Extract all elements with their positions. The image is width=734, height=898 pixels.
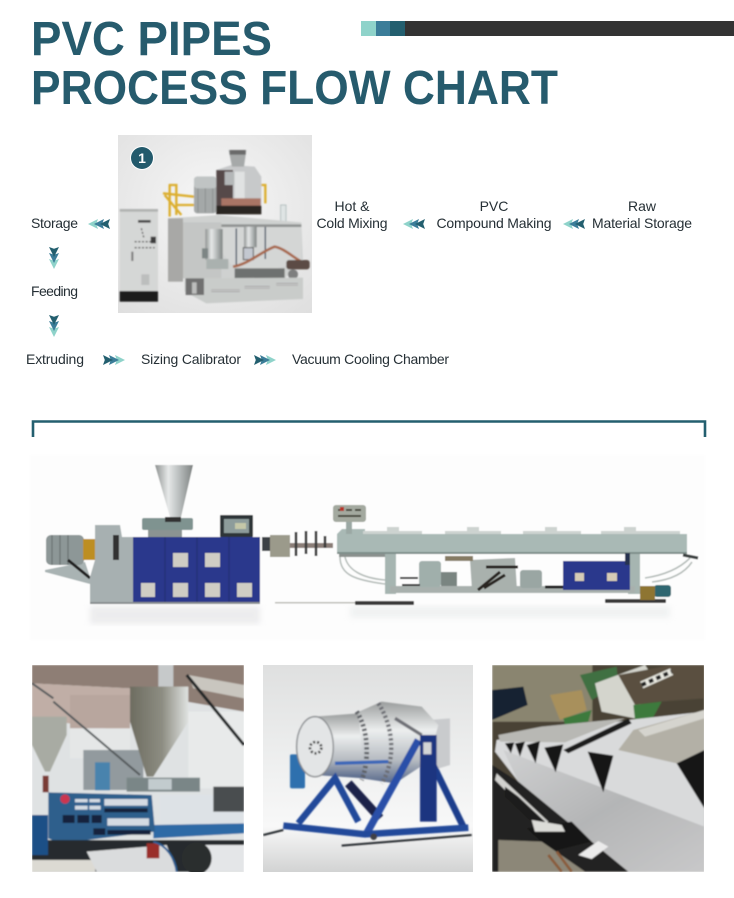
title — [31, 13, 558, 115]
control cabinet — [120, 209, 158, 292]
flow step: Raw Material Storage: Raw — [628, 198, 657, 214]
main cabinet — [168, 215, 303, 278]
motor — [290, 754, 305, 788]
lower mixer — [221, 223, 301, 269]
legs and base — [385, 554, 396, 594]
flow step: Feeding: Feeding — [31, 283, 78, 299]
blue control panel — [48, 792, 155, 843]
lower machinery — [492, 765, 628, 872]
arrow: extruding to calibrator — [103, 355, 125, 365]
hoses — [32, 683, 140, 775]
blue stand — [263, 735, 472, 846]
arrow: mixing to storage — [88, 219, 110, 229]
flow step: Sizing Calibrator: Sizing Calibrator — [141, 351, 241, 367]
tank lid — [618, 710, 704, 763]
background building — [83, 750, 143, 790]
extruder motor — [45, 562, 90, 584]
big hopper — [158, 665, 173, 687]
arrow: compound to mixing — [403, 219, 425, 229]
die face — [297, 717, 333, 777]
copper hose — [233, 247, 305, 267]
flow step: Storage: Storage — [31, 215, 78, 231]
vacuum pump motor — [654, 585, 671, 597]
flow step: PVC Compound Making: PVC — [480, 198, 508, 214]
photo: full extrusion line — [30, 455, 705, 640]
yellow rails — [163, 185, 265, 217]
base platform — [185, 278, 303, 303]
header colour bar — [361, 21, 734, 36]
arrow: calibrator to cooling — [254, 355, 276, 365]
rear housing — [434, 718, 450, 770]
flow step: Extruding: Extruding — [26, 351, 84, 367]
under-bed pumps — [419, 561, 441, 587]
flow step: Hot and Cold Mixing: Hot & — [334, 198, 370, 214]
small hopper — [32, 717, 67, 772]
thin base line — [275, 602, 355, 604]
factory ceiling — [32, 665, 244, 712]
hopper — [155, 465, 193, 517]
flow step: PVC Compound Making: Compound Making — [436, 215, 552, 231]
arrow: storage to feeding — [49, 247, 59, 269]
reflection — [90, 606, 670, 624]
title: PROCESS FLOW CHART — [31, 62, 558, 115]
control box — [220, 515, 253, 537]
small blue cabinet — [563, 561, 630, 590]
side motors — [205, 229, 223, 260]
calibrator beam — [337, 534, 687, 554]
workshop background — [492, 665, 592, 722]
photo: vacuum cooling tank — [492, 665, 704, 872]
flow step: Hot and Cold Mixing: Cold Mixing — [316, 215, 388, 231]
tank lids — [363, 527, 680, 534]
extruder gearbox — [90, 525, 133, 603]
step number badge: 1 — [138, 150, 146, 166]
die body — [355, 702, 438, 783]
arrow: raw material to compound — [563, 219, 585, 229]
small control panel — [333, 505, 366, 522]
black clamps — [505, 741, 704, 808]
flow step: Hot and Cold Mixing — [316, 198, 388, 231]
machine barrel — [160, 795, 244, 825]
section bracket — [33, 422, 705, 437]
flow step: Raw Material Storage: Material Storage — [592, 215, 692, 231]
photo: extrusion die head — [263, 665, 473, 872]
upper mixer — [218, 164, 263, 206]
flow step: Raw Material Storage — [592, 198, 692, 231]
lower machinery — [32, 840, 244, 872]
floor rails — [355, 601, 414, 605]
photo: high speed mixer machine — [118, 135, 312, 313]
flow step: PVC Compound Making — [436, 198, 552, 231]
hoses — [340, 557, 692, 584]
step number badge — [130, 146, 154, 170]
tail fitting — [683, 555, 698, 558]
dark rail — [563, 718, 632, 753]
tank body — [494, 712, 704, 828]
extruder blue body — [133, 537, 260, 603]
title: PVC PIPES — [31, 13, 272, 66]
rear motor — [193, 186, 217, 214]
photo: extruder in factory — [32, 665, 244, 874]
flow step: Vacuum Cooling Chamber: Vacuum Cooling Chamber — [292, 351, 449, 367]
arrow: feeding to extruding — [49, 315, 59, 337]
die head — [262, 537, 270, 551]
